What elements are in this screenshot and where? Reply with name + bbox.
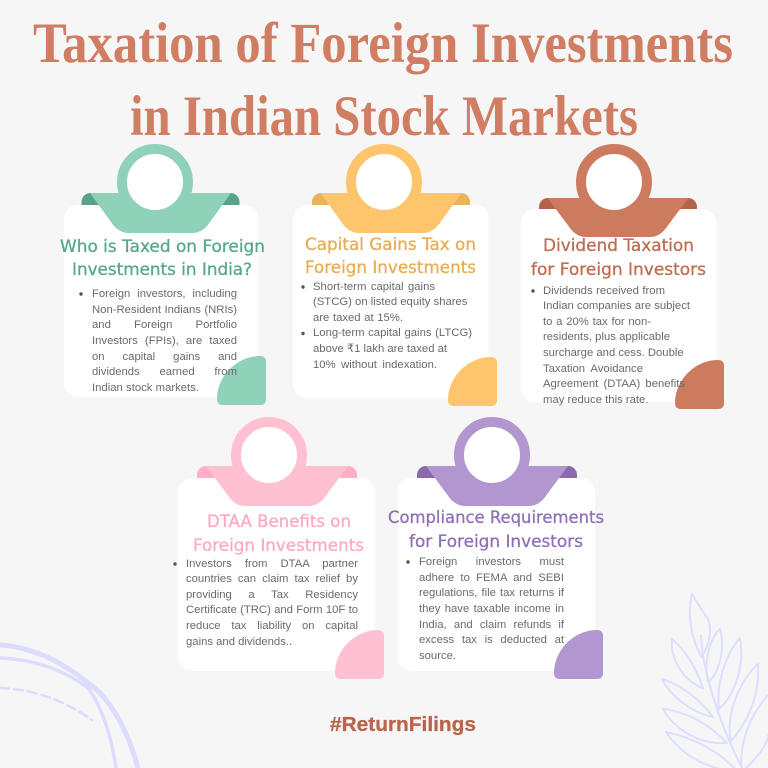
text: DTAA benefits: countries can claim tax relief by [186, 573, 358, 585]
panel: capital gains [293, 149, 497, 406]
heading: compliance requirements: for Foreign Investors [409, 532, 583, 552]
panel: compliance requirements [388, 422, 604, 679]
heading: dividend taxation [531, 236, 706, 280]
text: DTAA benefits: gains and dividends.. [186, 636, 292, 648]
heading: who is taxed: Who is Taxed on Foreign [60, 237, 265, 257]
text: dividend taxation: Agreement (DTAA) benefits [543, 378, 685, 390]
text: capital gains: 10% without indexation. [313, 359, 437, 371]
text: dividend taxation: to a 20% tax for non- [543, 316, 651, 328]
panel: who is taxed [60, 149, 266, 405]
text: compliance requirements: India, and claim refunds if [419, 619, 564, 631]
text: who is taxed: Investors (FPIs), are taxed [92, 335, 237, 347]
decoration: leaf branch bottom right [662, 594, 768, 768]
text: DTAA benefits [186, 556, 362, 652]
heading: who is taxed [60, 237, 265, 280]
text: capital gains [313, 280, 478, 376]
text: capital gains: (STCG) on listed equity shares [313, 296, 467, 308]
text: compliance requirements: Foreign investors must [419, 556, 564, 568]
text: capital gains: above ₹1 lakh are taxed at [313, 343, 447, 355]
text: dividend taxation: surcharge and cess. Double [543, 347, 684, 359]
text: compliance requirements: they have taxable income in [419, 603, 564, 615]
text: who is taxed: Non-Resident Indians (NRIs) [92, 304, 237, 316]
decoration: chalk arcs bottom left [0, 645, 138, 768]
text: dividend taxation: Dividends received from [543, 284, 665, 296]
text: capital gains: are taxed at 15%. [313, 312, 403, 324]
hashtag: #ReturnFilings [330, 714, 476, 736]
text: who is taxed: dividends earned from [92, 366, 237, 378]
panel: DTAA benefits [173, 422, 384, 679]
text: DTAA benefits: reduce tax liability on capital [186, 620, 358, 632]
panel: dividend taxation [521, 149, 724, 410]
text: dividend taxation: residents, plus applicable [543, 331, 670, 343]
text: DTAA benefits: providing a Tax Residency [186, 589, 358, 601]
text: dividend taxation: Taxation Avoidance [543, 363, 643, 375]
heading: dividend taxation: for Foreign Investors [531, 260, 706, 280]
text: DTAA benefits: Certificate (TRC) and Form 10F to [186, 604, 358, 616]
title: in Indian Stock Markets [130, 85, 638, 148]
text: compliance requirements: excess tax is deducted at [419, 634, 564, 646]
text: who is taxed [92, 287, 242, 399]
text: who is taxed: Indian stock markets. [92, 382, 199, 394]
text: dividend taxation: may reduce this rate. [543, 394, 648, 406]
heading: DTAA benefits: Foreign Investments [193, 536, 364, 556]
text: dividend taxation: Indian companies are subject [543, 300, 690, 312]
text: who is taxed: Foreign investors, including [92, 288, 237, 300]
text: compliance requirements [419, 555, 569, 667]
text: compliance requirements: regulations, file tax returns if [419, 587, 564, 599]
text: DTAA benefits: Investors from DTAA partner [186, 558, 358, 570]
heading: capital gains: Capital Gains Tax on [305, 235, 476, 255]
text: who is taxed: and Foreign Portfolio [92, 319, 237, 331]
title [33, 12, 733, 148]
text: capital gains: Short-term capital gains [313, 280, 435, 292]
heading: compliance requirements [388, 508, 604, 552]
heading: compliance requirements: Compliance Requirements [388, 508, 604, 528]
text: compliance requirements: source. [419, 650, 456, 662]
heading: DTAA benefits: DTAA Benefits on [207, 512, 351, 532]
heading: DTAA benefits [193, 512, 364, 556]
text: dividend taxation [543, 284, 698, 410]
text: who is taxed: on capital gains and [92, 351, 237, 363]
heading: dividend taxation: Dividend Taxation [543, 236, 694, 256]
heading: capital gains: Foreign Investments [305, 258, 476, 278]
text: capital gains: Long-term capital gains (LTCG) [313, 327, 472, 339]
heading: capital gains [305, 235, 476, 278]
text: compliance requirements: adhere to FEMA and SEBI [419, 572, 564, 584]
heading: who is taxed: Investments in India? [72, 260, 252, 280]
